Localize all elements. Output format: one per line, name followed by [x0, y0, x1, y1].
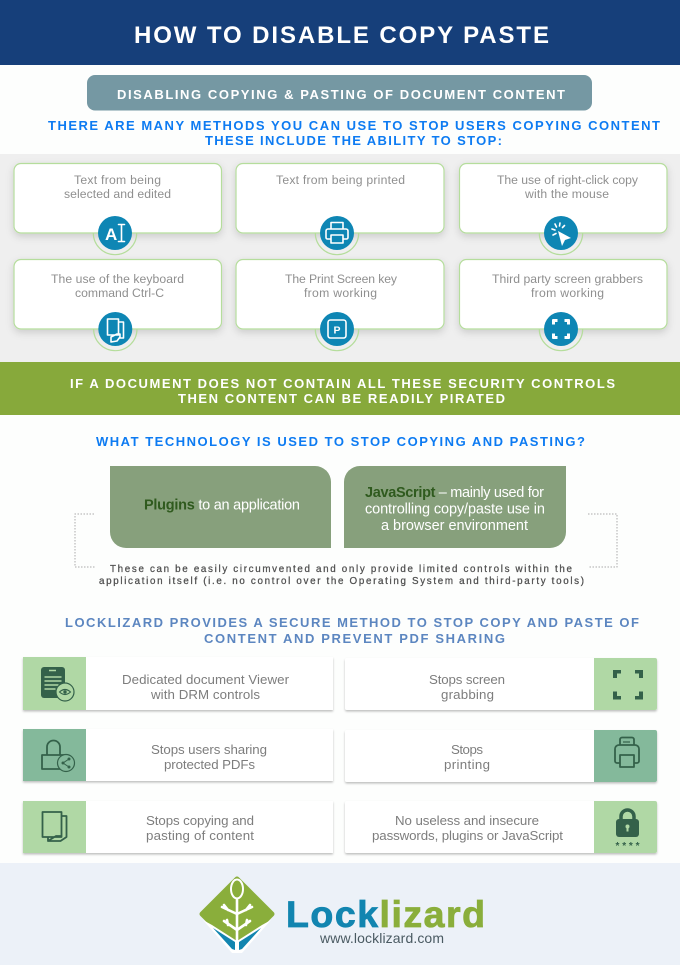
card: printing: [236, 164, 444, 255]
card: print screen key: [236, 260, 444, 351]
bracket left: [75, 514, 96, 567]
feature: no passwords: [345, 801, 657, 853]
feature: no passwords: passwords, plugins or JavaScript: [372, 828, 563, 843]
feature: screen grabbing: [345, 658, 657, 710]
card: right-click: [460, 164, 667, 255]
card: print screen key: The Print Screen key: [285, 272, 398, 286]
intro heading: [48, 118, 660, 148]
warning band: [0, 362, 680, 415]
feature: viewer: [23, 657, 333, 710]
logo url: www.locklizard.com: [319, 930, 444, 946]
card: text selection: selected and edited: [64, 187, 171, 201]
feature: no passwords: No useless and insecure: [395, 813, 539, 828]
locklizard heading: [65, 615, 639, 646]
feature: screen grabbing: grabbing: [441, 687, 494, 702]
card: right-click: with the mouse: [524, 187, 609, 201]
card: keyboard command: command Ctrl-C: [75, 286, 164, 300]
feature: sharing: protected PDFs: [164, 757, 255, 772]
subtitle pill: [87, 75, 592, 110]
footer: [0, 863, 680, 965]
feature: no passwords: ****: [616, 841, 640, 852]
intro heading: THESE INCLUDE THE ABILITY TO STOP:: [205, 133, 502, 148]
card: screen grabbers: from working: [531, 286, 604, 300]
limitation note: application itself (i.e. no control over the Operating System and third-party tools): [99, 576, 584, 587]
warning band: THEN CONTENT CAN BE READILY PIRATED: [178, 391, 505, 406]
feature: printing: Stops: [451, 742, 483, 757]
limitation note: [99, 564, 584, 587]
box: javascript: [344, 466, 566, 548]
limitation note: These can be easily circumvented and only provide limited controls within the: [110, 564, 573, 575]
card: screen grabbers: [460, 260, 667, 351]
box: javascript: controlling copy/paste use in: [365, 502, 545, 518]
feature: printing: printing: [444, 757, 490, 772]
logo wordmark: Locklizard: [286, 893, 485, 935]
title banner: HOW TO DISABLE COPY PASTE: [134, 22, 549, 49]
feature: screen grabbing: Stops screen: [429, 672, 505, 687]
panel: abilities to stop: [0, 154, 680, 362]
card: text selection: A: [105, 225, 117, 244]
feature: sharing: Stops users sharing: [151, 742, 267, 757]
locklizard heading: CONTENT AND PREVENT PDF SHARING: [204, 631, 505, 646]
technology heading: WHAT TECHNOLOGY IS USED TO STOP COPYING AND PASTING?: [96, 434, 585, 449]
card: print screen key: from working: [304, 286, 377, 300]
locklizard heading: LOCKLIZARD PROVIDES A SECURE METHOD TO STOP COPY AND PASTE OF: [65, 615, 639, 630]
card: text selection: Text from being: [74, 173, 161, 187]
feature: viewer: with DRM controls: [150, 687, 260, 702]
box: plugins: Plugins to an application: [144, 498, 300, 514]
card: keyboard command: [14, 260, 222, 351]
card: print screen key: P: [334, 324, 341, 336]
feature: sharing: [23, 729, 333, 781]
box: plugins: [110, 466, 331, 548]
box: javascript: a browser environment: [381, 518, 528, 534]
card: screen grabbers: Third party screen grabbers: [492, 272, 643, 286]
feature: printing: [345, 730, 657, 782]
feature: copying: Stops copying and: [146, 813, 254, 828]
feature: viewer: Dedicated document Viewer: [122, 672, 290, 687]
icon: locklizard logo: [202, 879, 272, 953]
feature: copying: [23, 801, 333, 853]
warning band: IF A DOCUMENT DOES NOT CONTAIN ALL THESE SECURITY CONTROLS: [70, 376, 615, 391]
title banner: [0, 0, 680, 65]
card: printing: Text from being printed: [276, 173, 405, 187]
card: keyboard command: The use of the keyboard: [51, 272, 184, 286]
feature: copying: pasting of content: [146, 828, 254, 843]
intro heading: THERE ARE MANY METHODS YOU CAN USE TO STOP USERS COPYING CONTENT: [48, 118, 660, 133]
subtitle pill: DISABLING COPYING & PASTING OF DOCUMENT CONTENT: [117, 87, 565, 102]
card: text selection: [14, 164, 222, 255]
card: right-click: The use of right-click copy: [497, 173, 639, 187]
box: javascript: JavaScript – mainly used for: [365, 485, 544, 501]
bracket right: [588, 514, 617, 567]
